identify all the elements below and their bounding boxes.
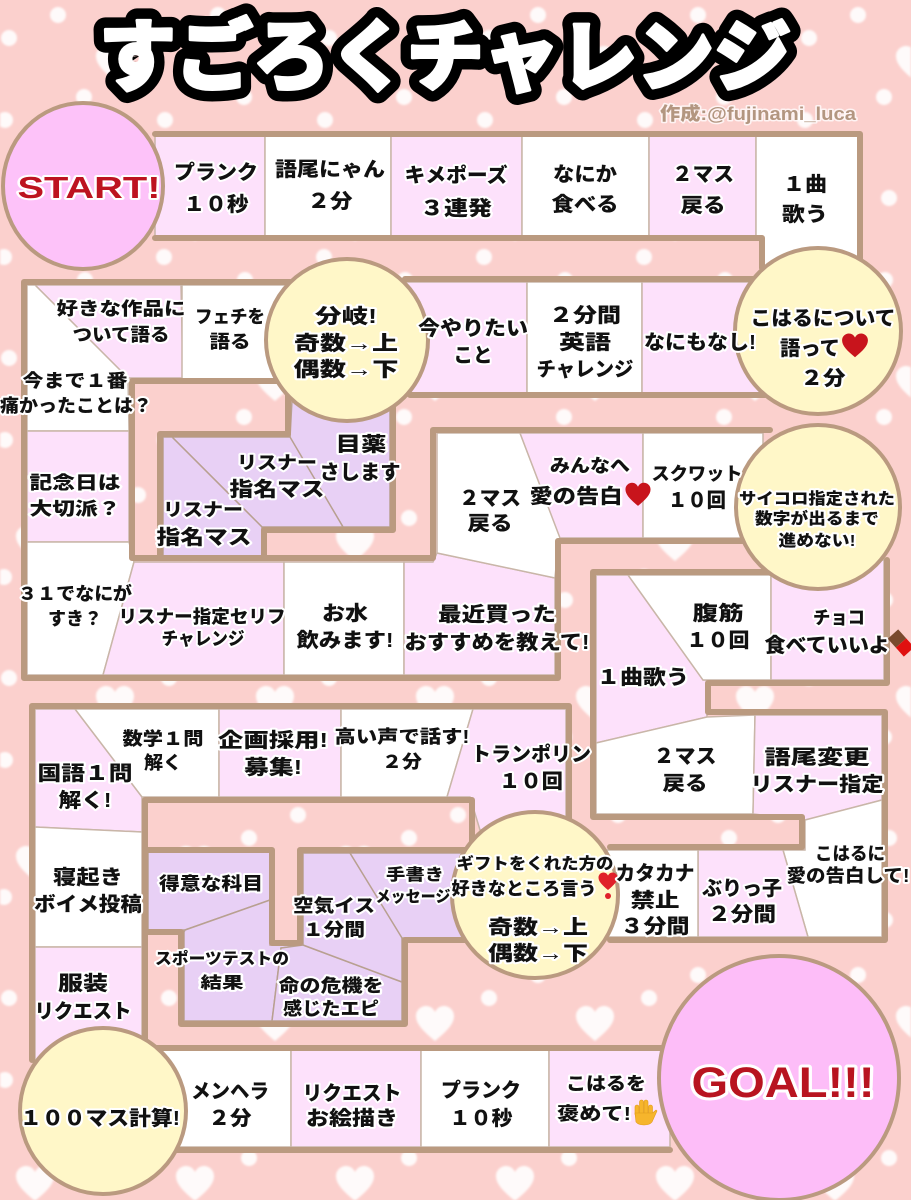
space: リクエストお絵描き — [291, 1050, 421, 1147]
text: 今まで1番痛かったことは — [0, 370, 152, 416]
text: プランク10秒: １０秒 — [450, 1107, 512, 1130]
text: 国語1問解く — [38, 762, 132, 812]
text: 空気イス1分間 — [293, 895, 375, 940]
space: 手書きメッセージ — [350, 853, 475, 938]
text: 2マス戻る: 戻る — [662, 773, 708, 795]
text: チョコ食べていいよ: チョコ — [813, 608, 865, 628]
space: なにもなし — [642, 282, 770, 393]
text: スクワット10回: １０回 — [668, 490, 726, 512]
text: トランポリン10回 — [471, 743, 591, 793]
text: 語尾にゃん2分 — [275, 158, 385, 213]
text: 企画採用募集: 募集! — [244, 756, 302, 779]
text: 命の危機を感じたエピ: 感じたエピ — [283, 998, 379, 1019]
text: 100マス計算: １００マス計算! — [20, 1106, 180, 1130]
space: 2分間英語チャレンジ — [527, 282, 642, 393]
text: キメポーズ3連発 — [404, 163, 508, 220]
text: スポーツテストの結果: スポーツテストの — [155, 949, 289, 968]
text: お水飲みます: 飲みます! — [296, 628, 394, 652]
text: 手書きメッセージ: メッセージ — [376, 888, 450, 906]
text: スクワット10回: スクワット — [652, 464, 742, 484]
text: 2マス戻る: ２マス — [459, 488, 521, 510]
space: 好きな作品について語る — [35, 285, 183, 378]
text: 最近買ったおすすめを教えて: 最近買った — [438, 603, 556, 626]
text: フェチを語る: 語る — [210, 332, 250, 352]
text: 2分間英語チャレンジ: ２分間 — [549, 304, 621, 327]
text: 1曲歌う: 歌う — [782, 203, 828, 226]
space: 最近買ったおすすめを教えて — [404, 553, 555, 675]
text: お水飲みます — [296, 602, 394, 652]
text: みんなへ愛の告白: 愛の告白 — [530, 484, 622, 508]
text: 服装リクエスト: リクエスト — [34, 1000, 132, 1023]
text: リスナー指名マス(下): 指名マス — [156, 525, 252, 549]
text: サイコロ指定された数字が出るまで進めない: サイコロ指定された — [739, 489, 895, 508]
text: 記念日は大切派: 記念日は — [30, 473, 120, 493]
text: トランポリン10回: トランポリン — [471, 743, 591, 766]
text: 得意な科目: 得意な科目 — [159, 873, 263, 894]
text: こはるについて語って2分: 語って — [780, 337, 840, 360]
text: 企画採用募集 — [218, 728, 328, 779]
circle: こはるについて語って — [735, 248, 901, 414]
text: 今やりたいこと — [418, 316, 528, 367]
text: 2マス戻る: ２マス — [654, 746, 716, 768]
text: チョコ食べていいよ — [764, 608, 890, 657]
space: 数学1問解く — [75, 709, 219, 797]
text: 語尾変更リスナー指定: リスナー指定 — [750, 773, 884, 796]
text: 手書きメッセージ — [376, 865, 450, 906]
text: こはるを褒めて: 褒めて! — [557, 1104, 631, 1124]
text: 2マス戻る — [672, 164, 734, 217]
circle: ギフト分岐 — [452, 812, 618, 978]
circle: サイコロ指定 — [736, 425, 900, 589]
text: カタカナ禁止3分間: カタカナ — [616, 862, 694, 885]
text: 国語1問解く: 国語１問 — [38, 762, 132, 785]
space: こはるを褒めて — [549, 1050, 670, 1147]
text: 2マス戻る: 戻る — [468, 513, 512, 535]
space: 語尾にゃん2分 — [265, 135, 391, 236]
title: すごろくチャレンジ — [99, 13, 791, 101]
text: 命の危機を感じたエピ — [278, 975, 384, 1019]
text: こはるに愛の告白して — [786, 844, 910, 886]
text: リスナー指名マス(下) — [156, 500, 252, 549]
text: 寝起きボイメ投稿: ボイメ投稿 — [34, 893, 142, 916]
title: すごろくチャレンジ — [99, 13, 791, 101]
text: 分岐 奇数上 偶数下: 偶数→下 — [294, 358, 398, 381]
text: 企画採用募集: 企画採用! — [218, 728, 328, 752]
text: 31でなにがすき: ３１でなにが — [18, 583, 132, 604]
text: 空気イス1分間: 空気イス — [293, 895, 375, 916]
text: 空気イス1分間: １分間 — [303, 920, 365, 940]
space: 今まで1番痛かったことは — [27, 285, 129, 431]
text: ギフトをくれた方の好きなところ言う: 好きなところ言う — [452, 879, 596, 899]
text: メンヘラ2分 — [191, 1081, 269, 1130]
text: 目薬さします: 目薬 — [336, 433, 386, 456]
text: 命の危機を感じたエピ: 命の危機を — [278, 975, 384, 996]
text: プランク10秒: プランク — [441, 1079, 521, 1102]
text: 語尾にゃん2分: 語尾にゃん — [275, 158, 385, 181]
text: 語尾にゃん2分: ２分 — [308, 190, 352, 213]
board spaces: bottom row — [160, 1050, 670, 1147]
text: 2マス戻る: 戻る — [680, 195, 726, 217]
text: なにもなし: なにもなし! — [644, 331, 756, 354]
space: リスナー指名マス(上) — [172, 437, 343, 527]
text: 2分間英語チャレンジ: チャレンジ — [536, 358, 634, 381]
text: こはるについて語って2分: ２分 — [800, 367, 846, 390]
text: スクワット10回 — [652, 464, 742, 512]
text: なにか食べる: 食べる — [552, 192, 618, 216]
text: みんなへ愛の告白 — [530, 456, 630, 508]
text: リスナー指名マス(下): リスナー — [163, 500, 243, 520]
space: 2マス戻る — [437, 433, 560, 578]
text: 高い声で話す2分 — [334, 726, 470, 772]
space: メンヘラ2分 — [160, 1050, 291, 1147]
space: キメポーズ3連発 — [391, 135, 522, 236]
space: 得意な科目 — [148, 852, 270, 930]
text: 今やりたいこと: こと — [454, 345, 492, 367]
text: 腹筋10回: １０回 — [686, 630, 750, 652]
text: フェチを語る: フェチを — [195, 307, 265, 327]
text: フェチを語る — [195, 307, 265, 352]
space: 国語1問解く — [35, 709, 142, 832]
board spaces: top row — [155, 135, 858, 268]
space: 目薬さします — [290, 400, 390, 527]
space: 企画採用募集 — [219, 709, 341, 797]
text: 記念日は大切派: 大切派？ — [30, 499, 120, 519]
circle: 分岐 — [266, 259, 428, 421]
space: 服装リクエスト — [35, 947, 142, 1062]
text: リクエストお絵描き: お絵描き — [306, 1107, 398, 1130]
text: プランク10秒: １０秒 — [184, 193, 248, 216]
text: 服装リクエスト — [34, 972, 132, 1023]
text: 奇数上 偶数下 — [488, 916, 588, 965]
text: 目薬さします: さします — [320, 461, 400, 484]
space: カタカナ禁止3分間 — [600, 850, 698, 937]
text: 今まで1番痛かったことは: 今まで１番 — [22, 370, 128, 391]
text: メンヘラ2分: ２分 — [208, 1107, 252, 1130]
text: ギフトをくれた方の好きなところ言う: ギフトをくれた方の — [456, 854, 614, 873]
text: 2マス戻る — [654, 746, 716, 795]
text: 好きな作品について語る — [56, 299, 186, 345]
text: こはるに愛の告白して: 愛の告白して! — [786, 865, 910, 886]
text: 奇数上 偶数下: 奇数→上 — [488, 916, 588, 939]
text: 最近買ったおすすめを教えて: おすすめを教えて! — [404, 631, 590, 654]
text: リスナー指定セリフチャレンジ: チャレンジ — [162, 629, 244, 649]
text: なにか食べる — [552, 163, 618, 216]
text: チョコ食べていいよ: 食べていいよ — [764, 633, 890, 657]
text: 31でなにがすき — [18, 583, 132, 629]
text: こはるについて語って2分: こはるについて — [750, 308, 896, 330]
space: フェチを語る — [182, 285, 290, 379]
text: リスナー指名マス(上): 指名マス — [230, 477, 324, 501]
space: みんなへ愛の告白 — [520, 433, 643, 538]
text: 2分間英語チャレンジ: 英語 — [559, 331, 611, 354]
space: トランポリン10回 — [447, 709, 566, 830]
text: プランク10秒: プランク — [174, 161, 258, 184]
text: こはるに愛の告白して: こはるに — [815, 844, 885, 864]
text: 国語1問解く: 解く! — [58, 789, 112, 812]
text: 2マス戻る — [459, 488, 521, 535]
space: お水飲みます — [284, 562, 404, 675]
text: 目薬さします — [320, 433, 400, 484]
space: 1曲歌う — [596, 575, 707, 743]
text: リスナー指名マス(上): リスナー — [237, 453, 317, 473]
text: メンヘラ2分: メンヘラ — [191, 1081, 269, 1103]
icon: chocolate — [888, 629, 911, 657]
space: プランク10秒 — [155, 135, 265, 236]
space: 語尾変更リスナー指定 — [753, 715, 882, 820]
space: 今やりたいこと — [400, 282, 527, 393]
text: お水飲みます: お水 — [322, 602, 368, 625]
text: 語尾変更リスナー指定: 語尾変更 — [764, 746, 870, 769]
text: サイコロ指定された数字が出るまで進めない: 数字が出るまで — [755, 509, 879, 528]
text: トランポリン10回: １０回 — [499, 771, 563, 793]
circle: START — [3, 103, 163, 269]
text: 寝起きボイメ投稿 — [34, 866, 142, 916]
text: 服装リクエスト: 服装 — [58, 972, 108, 995]
text: ぶりっ子2分間: ２分間 — [708, 903, 776, 926]
icon: heart exclamation — [598, 872, 618, 899]
text: 数学1問解く — [122, 728, 204, 773]
board spaces: second section — [27, 282, 770, 675]
text: リスナー指定セリフチャレンジ: リスナー指定セリフ — [118, 606, 286, 627]
text: 数学1問解く: 数学１問 — [122, 728, 204, 749]
icon: raised hand — [635, 1100, 657, 1125]
text: 好きな作品について語る: 好きな作品に — [56, 299, 186, 319]
text: 分岐 奇数上 偶数下: 分岐! — [315, 305, 377, 328]
text: 2分間英語チャレンジ — [536, 304, 634, 381]
text: リスナー指名マス(上) — [230, 453, 324, 501]
text: 高い声で話す2分: 高い声で話す! — [334, 726, 470, 747]
space: 高い声で話す — [341, 709, 473, 797]
space: なにか食べる — [522, 135, 649, 236]
text: カタカナ禁止3分間: 禁止 — [630, 888, 680, 912]
board spaces: third section — [596, 560, 884, 937]
space: 空気イス1分間 — [303, 853, 402, 982]
space: スポーツテストの結果 — [184, 900, 303, 1021]
text: こはるについて語って2分 — [750, 308, 896, 390]
text: 今まで1番痛かったことは: 痛かったことは？ — [0, 396, 152, 416]
text: 31でなにがすき: すき？ — [48, 609, 102, 629]
text: ぶりっ子2分間 — [702, 877, 782, 926]
space: 2マス戻る — [596, 715, 755, 814]
text: サイコロ指定された数字が出るまで進めない: 進めない! — [778, 532, 856, 550]
text: 語尾変更リスナー指定 — [750, 746, 884, 796]
space: チョコ食べていいよ — [771, 560, 884, 680]
text: こはるを褒めて: こはるを — [566, 1074, 646, 1094]
text: 1曲歌う: １曲歌う — [597, 666, 689, 689]
text: スポーツテストの結果 — [155, 949, 289, 992]
space: リスナー指定セリフチャレンジ — [103, 562, 284, 675]
text: 最近買ったおすすめを教えて — [404, 603, 590, 654]
text: 高い声で話す2分: ２分 — [382, 752, 422, 772]
text: カタカナ禁止3分間: ３分間 — [620, 915, 690, 938]
text: 記念日は大切派 — [30, 473, 120, 519]
text: 分岐 奇数上 偶数下 — [294, 305, 398, 381]
text: 2マス戻る: ２マス — [672, 164, 734, 186]
text: スポーツテストの結果: 結果 — [200, 973, 244, 992]
text: キメポーズ3連発: ３連発 — [420, 197, 492, 220]
text: 手書きメッセージ: 手書き — [386, 865, 444, 884]
circle: 100マス計算 — [20, 1028, 186, 1194]
text: プランク10秒 — [174, 161, 258, 216]
text: 1曲歌う — [782, 173, 828, 226]
text: リクエストお絵描き: リクエスト — [302, 1082, 402, 1105]
label: GOAL!!!: GOAL!!! — [692, 1059, 874, 1107]
space: 寝起きボイメ投稿 — [35, 827, 142, 947]
text: リスナー指定セリフチャレンジ — [118, 606, 286, 649]
space: スクワット10回 — [643, 433, 763, 538]
text: 好きな作品について語る: ついて語る — [72, 325, 170, 345]
circle: GOAL — [659, 956, 899, 1200]
text: ぶりっ子2分間: ぶりっ子 — [702, 877, 782, 900]
text: カタカナ禁止3分間 — [616, 862, 694, 938]
space: 2マス戻る — [649, 135, 756, 236]
text: 寝起きボイメ投稿: 寝起き — [53, 866, 123, 889]
credit: 作成:@fujinami_luca — [660, 103, 857, 124]
space: 1曲歌う — [756, 135, 858, 268]
text: 腹筋10回: 腹筋 — [692, 601, 744, 625]
text: 今やりたいこと: 今やりたい — [418, 316, 528, 340]
space: プランク10秒 — [421, 1050, 549, 1147]
text: リクエストお絵描き — [302, 1082, 402, 1130]
text: キメポーズ3連発: キメポーズ — [404, 163, 508, 187]
space: 記念日は大切派 — [27, 431, 129, 542]
text: 奇数上 偶数下: 偶数→下 — [488, 942, 588, 965]
icon: red heart — [842, 333, 868, 357]
space: リスナー指名マス(下) — [163, 437, 262, 557]
space: 腹筋10回 — [628, 575, 771, 680]
text: 腹筋10回 — [686, 601, 750, 652]
text: 1曲歌う: １曲 — [783, 173, 827, 196]
space: 31でなにがすき — [27, 542, 134, 675]
text: プランク10秒 — [441, 1079, 521, 1130]
text: 数学1問解く: 解く — [144, 753, 182, 773]
space: ぶりっ子2分間 — [698, 850, 808, 937]
space: こはるに愛の告白して — [783, 800, 882, 937]
text: こはるを褒めて — [557, 1074, 646, 1124]
label: START!: START! — [18, 170, 160, 205]
icon: red heart — [625, 483, 651, 506]
space: 命の危機を感じたエピ — [272, 945, 402, 1021]
text: 分岐 奇数上 偶数下: 奇数→上 — [294, 332, 398, 355]
text: みんなへ愛の告白: みんなへ — [550, 456, 630, 476]
text: サイコロ指定された数字が出るまで進めない — [739, 489, 895, 550]
text: ギフトをくれた方の好きなところ言う — [452, 854, 614, 899]
board spaces: fourth section — [35, 709, 566, 1062]
text: なにか食べる: なにか — [553, 163, 617, 186]
